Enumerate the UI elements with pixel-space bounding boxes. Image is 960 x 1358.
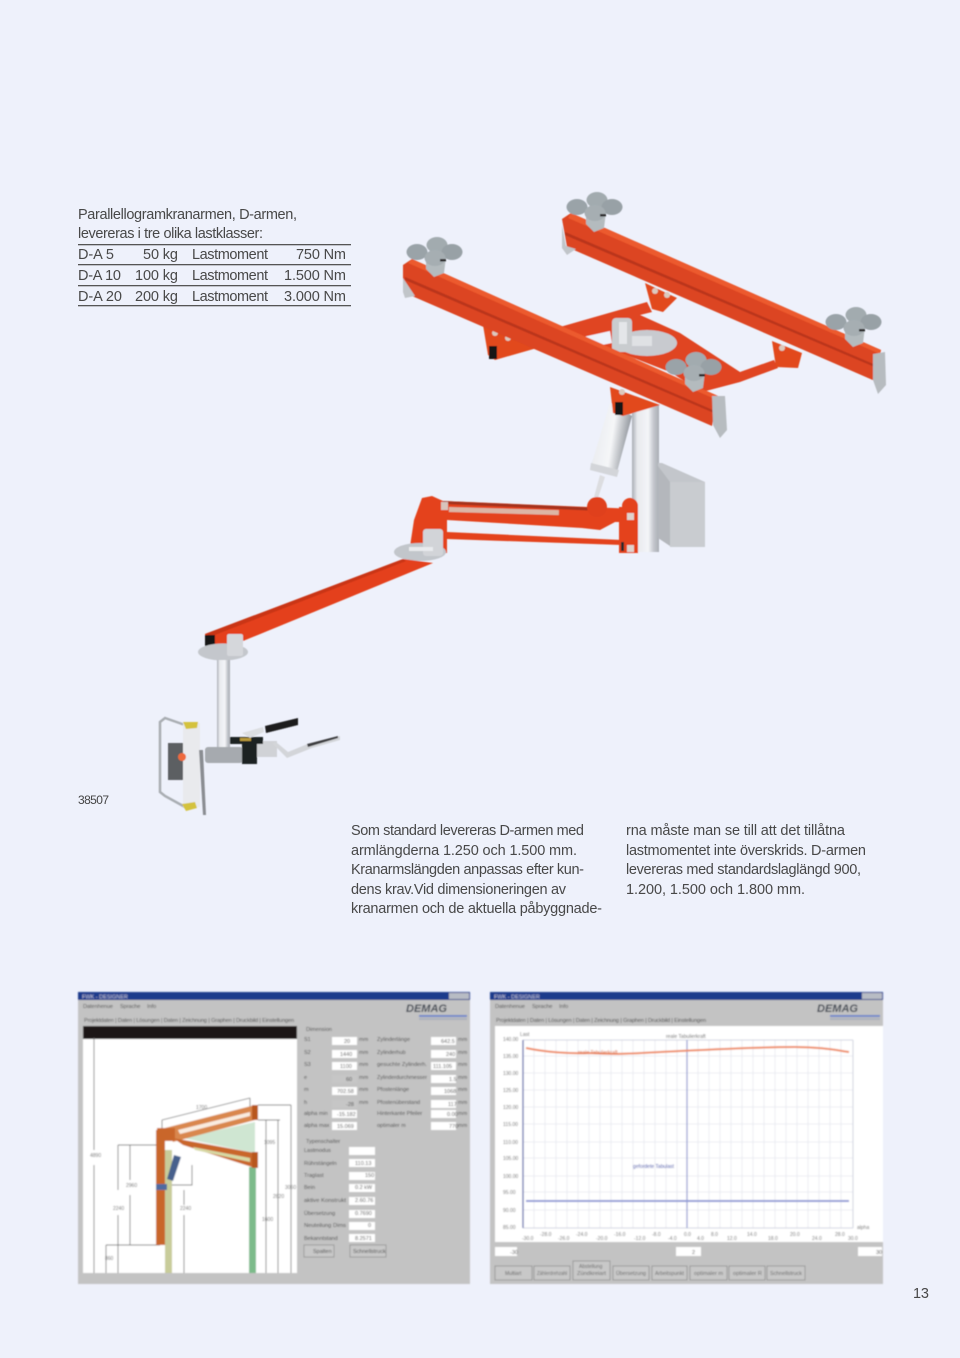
button row: Arbeitspunkt [655,1271,685,1277]
dimension fields: e [304,1075,307,1081]
parameter fields: Bein [304,1185,315,1191]
dimensioned arm drawing [90,1038,296,1273]
intro text and load class table: 200 kg [135,289,178,305]
button row: Zündkreiart [577,1271,607,1277]
dimensioned arm drawing: 4890 [90,1153,101,1159]
parameter fields: 0.7690 [355,1211,372,1217]
intro text and load class table: 3.000 Nm [284,289,346,305]
line chart: 30.0 [848,1236,858,1242]
body text column 2: 1.200, 1.500 och 1.800 mm. [626,882,805,898]
dimension fields: mm [359,1087,369,1093]
central pillar [632,405,659,552]
body text column 1: Kranarmslängden anpassas efter kun- [351,862,584,878]
button row: Multiart [505,1271,522,1277]
dimension fields: Dimension [306,1027,332,1033]
dimension fields: alpha max [304,1123,330,1129]
dimension fields: S1 [304,1037,311,1043]
dimensioned arm drawing: 1700 [196,1105,207,1111]
dimension fields: 60 [346,1077,352,1083]
dimension fields: 0.00 [447,1112,458,1118]
illustration: parallelogram crane arm [160,192,886,815]
line chart: -16.0 [614,1232,626,1238]
intro text and load class table: levereras i tre olika lastklasser: [78,226,263,242]
rotary platform [612,318,677,356]
title bar [490,992,883,1000]
dimension fields: optimaler m [377,1123,406,1129]
dimension fields: mm [359,1062,369,1068]
parameter fields: Lastmodus [304,1148,331,1154]
body text column 2 [626,823,866,898]
menu and tabs: Info [559,1004,568,1010]
body text column 1: dens krav.Vid dimensioneringen av [351,882,567,898]
line chart: 20.0 [790,1232,800,1238]
dimensioned arm drawing: 1600 [262,1217,273,1223]
line chart: 90.00 [503,1208,516,1214]
line chart: 115.00 [503,1122,518,1128]
lower disc [198,634,248,660]
line chart: 14.0 [747,1232,757,1238]
dimension fields: Hinterkante Pfeiler [377,1111,422,1117]
dimension fields: 1.5 [449,1077,457,1083]
intro text and load class table: D-A 20 [78,289,122,305]
line chart: reale Tabulierkraft [666,1034,706,1040]
intro text and load class table: D-A 5 [78,247,114,263]
page number: 13 [913,1286,929,1302]
line chart: 110.00 [503,1140,518,1146]
front rail [403,259,727,438]
screenshot: force graph window [490,992,883,1284]
line chart: -24.0 [576,1232,588,1238]
parameter fields: Bekanntstand [304,1236,338,1242]
image number: 38507 [78,793,109,807]
button row: Abstellung [579,1264,603,1270]
dimension fields: alpha min [304,1111,328,1117]
line chart: 95.00 [503,1190,516,1196]
button row: Übersetzung [616,1270,646,1277]
line chart: alpha [857,1225,869,1231]
line chart: -26.0 [558,1236,570,1242]
centre cross frame [540,302,778,392]
logo: DEMAG [406,1003,447,1015]
dimensioned arm drawing: 1095 [264,1140,275,1146]
dimension fields: 111.105 [433,1064,452,1070]
line chart: 140.00 [503,1037,519,1043]
arm: elbow disc [394,529,446,561]
line chart: -8.0 [652,1232,661,1238]
button row: Zählerdrehzahl [537,1271,567,1277]
control box [658,463,705,547]
line chart: 8.0 [711,1232,718,1238]
parameter fields: Neuteilung Dims [304,1223,346,1229]
dimension fields: S3 [304,1062,311,1068]
intro text and load class table [78,207,351,306]
line chart: 130.00 [503,1071,519,1077]
logo: DEMAG [817,1003,858,1015]
parameter fields: aktive Konstrukt [304,1198,346,1204]
menu and tabs: Info [147,1004,156,1010]
parameter fields: Übersetzung [304,1210,335,1217]
dimension fields: mm [458,1100,468,1106]
handling head [160,718,340,815]
line chart: -28.0 [540,1232,552,1238]
dimension fields: mm [359,1100,369,1106]
line chart: 120.00 [503,1105,519,1111]
dimensioned arm drawing: 2820 [273,1194,284,1200]
dimension fields: 117 [448,1102,457,1108]
parameter fields: 8.2571 [355,1236,372,1242]
dimensioned arm drawing: 3060 [285,1185,296,1191]
vertical shaft [217,660,230,748]
dimension fields: mm [359,1037,369,1043]
intro text and load class table: Lastmoment [192,289,268,305]
dimension fields: Zylinderlänge [377,1037,410,1043]
button row: optimaler R [733,1271,762,1277]
dimension fields: Pfostenlänge [377,1087,409,1093]
dimension fields: h [304,1100,307,1106]
title bar [78,992,470,1000]
parameter fields: Schnellstruck [353,1249,386,1255]
dimension fields: 1100 [340,1064,352,1070]
dimensioned arm drawing: 2240 [113,1206,124,1212]
intro text and load class table: Lastmoment [192,247,268,263]
button row: optimaler m [694,1271,723,1277]
menu and tabs: Sprache [532,1004,552,1010]
slider fields: 30 [876,1250,882,1256]
body text column 1: armlängderna 1.250 och 1.500 mm. [351,843,577,859]
intro text and load class table: 100 kg [135,268,178,284]
wheel carriage: rear rail right [826,307,882,347]
dimension fields: mm [359,1075,369,1081]
intro text and load class table: Parallellogramkranarmen, D-armen, [78,207,297,223]
line chart: 4.0 [697,1236,704,1242]
menu and tabs: Datenhenue [83,1004,113,1010]
parameter fields [304,1139,386,1257]
title bar: FWK - DESIGNER [82,994,128,1000]
intro text and load class table: 750 Nm [296,247,346,263]
dimension fields: Zylinderhub [377,1050,406,1056]
parameter fields: Typenschalter [306,1139,340,1145]
dimension fields: S2 [304,1050,311,1056]
intro text and load class table: D-A 10 [78,268,121,284]
dimension fields: 20 [344,1039,350,1045]
pneumatic cylinder [590,403,632,498]
intro text and load class table: 50 kg [143,247,178,263]
line chart: gefordete Tabulast [633,1164,675,1170]
body text column 1 [351,823,602,917]
body text column 2: levereras med standardslaglängd 900, [626,862,861,878]
line chart: -12.0 [634,1236,646,1242]
parameter fields: 110.13 [355,1161,371,1167]
parameter fields: Spalten [313,1249,332,1255]
parameter fields: Traglast [304,1173,324,1179]
menu and tabs: Sprache [120,1004,140,1010]
dimension fields: 642.5 [441,1039,455,1045]
wheel carriage: front rail left [406,237,462,277]
line chart: 24.0 [812,1236,822,1242]
dimension fields: 1068 [444,1089,456,1095]
arm: long boom [205,559,433,648]
chart area [495,1026,883,1242]
line chart: 28.0 [835,1232,845,1238]
dimension fields: mm [458,1050,468,1056]
line chart [503,1032,869,1242]
dimensioned arm drawing: 2960 [126,1183,137,1189]
arm: upper link assembly [409,496,638,553]
line chart: 105.00 [503,1156,519,1162]
line chart: -4.0 [668,1236,677,1242]
rear rail [562,213,886,394]
parameter fields: 150 [365,1173,374,1179]
line chart: 18.0 [768,1236,778,1242]
dimension fields: 15.069 [337,1124,354,1130]
parameter fields: Rührstängeln [304,1161,337,1167]
menu and tabs: Projektdaten | Daten | Lösungen | Daten | Zeichnung | Graphen | Druckbild | Einstellungen [496,1018,706,1024]
dimension fields: mm [458,1087,468,1093]
line chart: 125.00 [503,1088,519,1094]
screenshot: geometry window [78,992,470,1284]
body text column 2: rna måste man se till att det tillåtna [626,823,846,839]
title bar: FWK - DESIGNER [494,994,540,1000]
line chart: 100.00 [503,1174,519,1180]
dimension fields: m [304,1087,309,1093]
menu and tabs [83,1004,294,1024]
body text column 1: kranarmen och de aktuella påbyggnade- [351,901,602,917]
button row [495,1261,805,1280]
dimension fields: mm [458,1075,468,1081]
dimension fields: mm [458,1062,468,1068]
slider fields [495,1247,882,1256]
wheel carriage: centre [666,352,722,392]
line chart: -20.0 [596,1236,608,1242]
line chart: 0.0 [684,1232,691,1238]
drawing area [83,1038,297,1273]
dimension fields [304,1027,468,1130]
menu and tabs: Projektdaten | Daten | Lösungen | Daten | Zeichnung | Graphen | Druckbild | Einstellungen [84,1018,294,1024]
dimensioned arm drawing: 860 [105,1256,114,1262]
line chart: -30.0 [522,1236,534,1242]
menu and tabs: Datenhenue [495,1004,525,1010]
dimension fields: 1440 [340,1052,352,1058]
intro text and load class table: Lastmoment [192,268,268,284]
line chart: Last [520,1032,530,1038]
menu and tabs [495,1004,706,1024]
line chart: 135.00 [503,1054,519,1060]
logo [406,1003,467,1020]
dimension fields: mm [359,1050,369,1056]
parameter fields: 0 [368,1223,371,1229]
dimensioned arm drawing: 2240 [180,1206,191,1212]
dimension fields: Pfostenüberstand [377,1100,420,1106]
slider fields: 2 [692,1250,695,1256]
dimension fields: 702.58 [337,1089,354,1095]
parameter fields: 2.60.76 [355,1198,373,1204]
front rail brackets [483,325,660,416]
dimension fields: mm [458,1037,468,1043]
wheel carriage: rear rail left [566,192,622,232]
dimension fields: 240 [446,1052,455,1058]
logo [817,1003,880,1020]
dimension fields: -15.182 [337,1112,356,1118]
body text column 1: Som standard levereras D-armen med [351,823,584,839]
dimension fields: 770 [449,1124,458,1130]
line chart: reale Tabulierkraft [578,1050,618,1056]
intro text and load class table: 1.500 Nm [284,268,346,284]
dimension fields: gesuchte Zylinderh. [377,1062,427,1068]
parameter fields: 0.2 kW [355,1185,373,1191]
line chart: 85.00 [503,1225,516,1231]
dimension fields: mm [458,1123,468,1129]
body text column 2: lastmomentet inte överskrids. D-armen [626,843,866,859]
slider fields: -30 [510,1250,518,1256]
dimension fields: -28 [346,1102,354,1108]
line chart: 12.0 [727,1236,737,1242]
button row: Schnellstruck [770,1271,803,1277]
dimension fields: mm [458,1111,468,1117]
dimension fields: Zylinderdurchmesser [377,1075,427,1081]
